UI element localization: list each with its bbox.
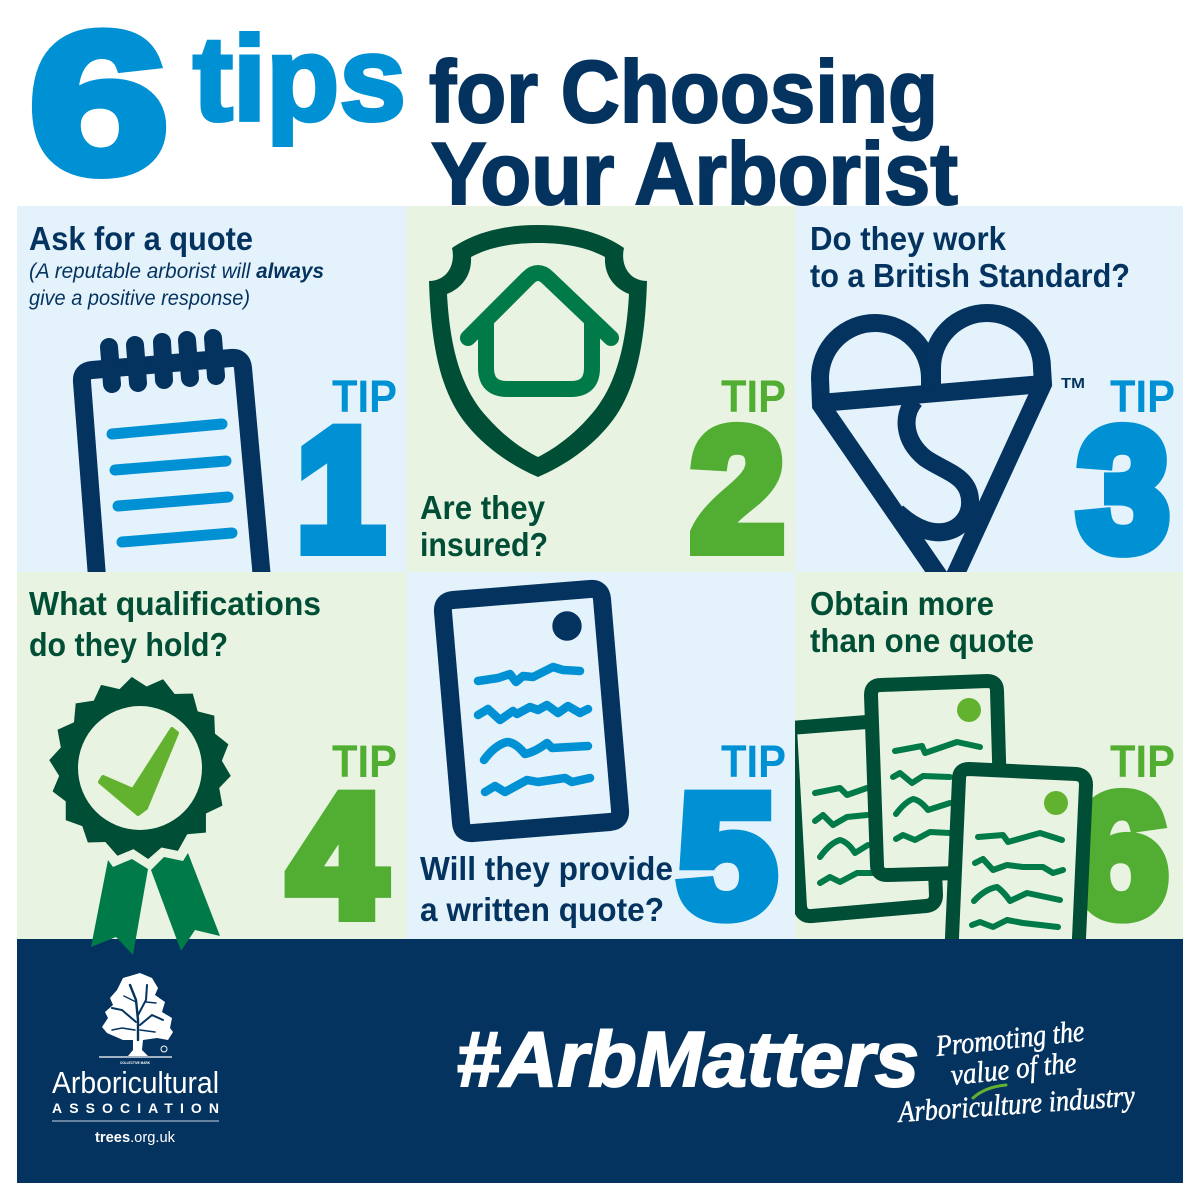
- number 3: 3: [1078, 394, 1169, 586]
- ASSOCIATION: ASSOCIATION: [52, 1100, 219, 1116]
- tip 5 heading: a written quote?: [420, 891, 664, 928]
- number 5: 5: [678, 760, 776, 952]
- TIP label 1: TIP: [332, 371, 397, 422]
- icon: shield with house: [429, 225, 647, 477]
- Your Arborist: Your Arborist: [431, 124, 958, 223]
- rosette seal: [48, 676, 232, 860]
- tip 6 heading: than one quote: [810, 622, 1034, 659]
- tip 5 heading: Will they provide: [420, 850, 673, 887]
- trees.org.uk: trees.org.uk: [95, 1129, 175, 1146]
- number 6: 6: [1072, 760, 1168, 952]
- collective mark: COLLECTIVE MARK: [120, 1061, 150, 1065]
- icon: rosette: [48, 676, 232, 955]
- number 2: 2: [691, 394, 784, 586]
- title: [29, 0, 958, 223]
- panel: tip 1: [17, 206, 406, 590]
- footer band: [17, 939, 1183, 1183]
- panel: tip 2: [406, 206, 795, 586]
- icon: written document: [443, 589, 620, 833]
- tip 3 heading: [810, 220, 1130, 294]
- panel: tip 5: [406, 572, 795, 952]
- tip 3 heading: to a British Standard?: [810, 257, 1130, 294]
- tip 2 heading: [420, 489, 548, 563]
- trademark symbol: TM: [1061, 375, 1085, 392]
- tip 1 subtext: give a positive response): [29, 287, 250, 310]
- number 4: 4: [289, 760, 385, 952]
- icon: three quotes: [790, 681, 1086, 960]
- tip 4 heading: [29, 585, 321, 663]
- hashtag: #ArbMatters: [456, 1015, 919, 1103]
- panel: tip 3: [795, 206, 1183, 586]
- TIP label 6: TIP: [1110, 736, 1175, 787]
- tip 3 heading: Do they work: [810, 220, 1007, 257]
- handwritten tagline: [895, 1015, 1137, 1129]
- tip 1 subtext: (A reputable arborist will always: [29, 260, 324, 283]
- handwritten tagline: Arboriculture industry: [895, 1079, 1137, 1129]
- tip 5 heading: [420, 850, 673, 928]
- icon: tree: [99, 973, 173, 1057]
- tip 1 heading: Ask for a quote: [29, 220, 253, 257]
- handwritten tagline: Promoting the: [933, 1015, 1086, 1063]
- Arboricultural: Arboricultural: [52, 1065, 219, 1100]
- TIP label 3: TIP: [1110, 371, 1175, 422]
- TIP label 4: TIP: [332, 736, 397, 787]
- check mark: [100, 729, 177, 814]
- ribbons: [91, 853, 220, 955]
- tips: tips: [193, 12, 406, 146]
- TIP label 5: TIP: [721, 736, 786, 787]
- panel: tip 4: [17, 572, 406, 952]
- tip 6 heading: Obtain more: [810, 585, 994, 622]
- tip 2 heading: insured?: [420, 526, 548, 563]
- handwritten tagline: value of the: [949, 1046, 1078, 1092]
- logo: Arboricultural Association: [52, 973, 219, 1146]
- tip 4 heading: do they hold?: [29, 626, 228, 663]
- tip 4 heading: What qualifications: [29, 585, 321, 622]
- number 1: 1: [297, 394, 384, 586]
- icon: notepad: [82, 338, 263, 590]
- TIP label 2: TIP: [721, 371, 786, 422]
- icon: kitemark: [820, 313, 1043, 582]
- panel: tip 6: [790, 572, 1183, 960]
- tip 1 subtext: [29, 260, 324, 310]
- for Choosing: for Choosing: [429, 42, 938, 141]
- tip 2 heading: Are they: [420, 489, 546, 526]
- tip 6 heading: [810, 585, 1034, 659]
